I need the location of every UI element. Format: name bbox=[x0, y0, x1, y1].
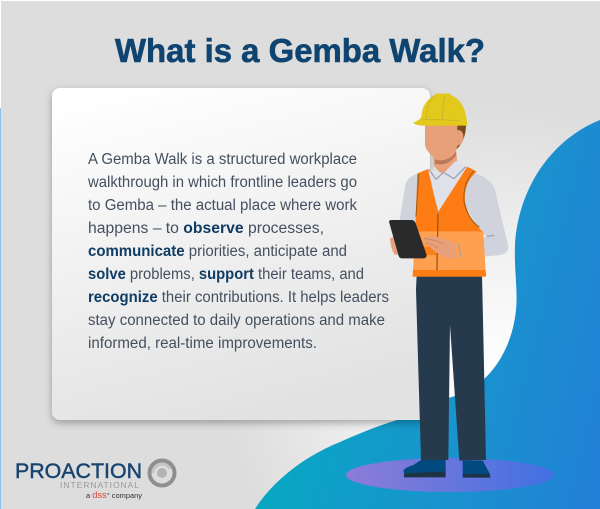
logo tagline: a dss° company bbox=[86, 490, 142, 500]
upper body bbox=[389, 93, 508, 277]
neck bbox=[433, 148, 457, 175]
hair and ear bbox=[455, 125, 466, 151]
hard hat bbox=[413, 93, 467, 126]
definition text bbox=[87, 151, 389, 352]
logo subtitle: INTERNATIONAL bbox=[60, 480, 139, 490]
logo: Proaction International bbox=[15, 460, 174, 500]
logo wordmark: PROACTION bbox=[15, 460, 142, 483]
blue wave shape bbox=[255, 120, 600, 509]
logo spiral mark bbox=[150, 460, 174, 486]
definition text: stay connected to daily operations and make bbox=[88, 312, 385, 329]
tablet bbox=[389, 220, 427, 258]
definition text: to Gemba – the actual place where work bbox=[88, 197, 357, 214]
left hand bbox=[390, 237, 401, 255]
definition text: recognize their contributions. It helps leaders bbox=[88, 289, 389, 306]
hi-vis vest bbox=[415, 169, 438, 232]
panel: definition card bbox=[52, 88, 430, 420]
face bbox=[425, 125, 457, 160]
definition text: happens – to observe processes, bbox=[88, 220, 324, 237]
definition text: informed, real-time improvements. bbox=[88, 335, 317, 352]
illustration: worker bbox=[389, 93, 508, 478]
trousers and shoes bbox=[403, 275, 490, 478]
shirt bbox=[428, 161, 467, 213]
right hand bbox=[423, 236, 457, 258]
definition text: A Gemba Walk is a structured workplace bbox=[88, 151, 357, 168]
sleeves bbox=[399, 173, 418, 225]
title: What is a Gemba Walk? bbox=[115, 33, 485, 70]
definition text: solve problems, support their teams, and bbox=[88, 266, 364, 283]
definition text: walkthrough in which frontline leaders go bbox=[87, 174, 357, 191]
ground ellipse bbox=[346, 458, 554, 492]
definition text: communicate priorities, anticipate and bbox=[88, 243, 347, 260]
